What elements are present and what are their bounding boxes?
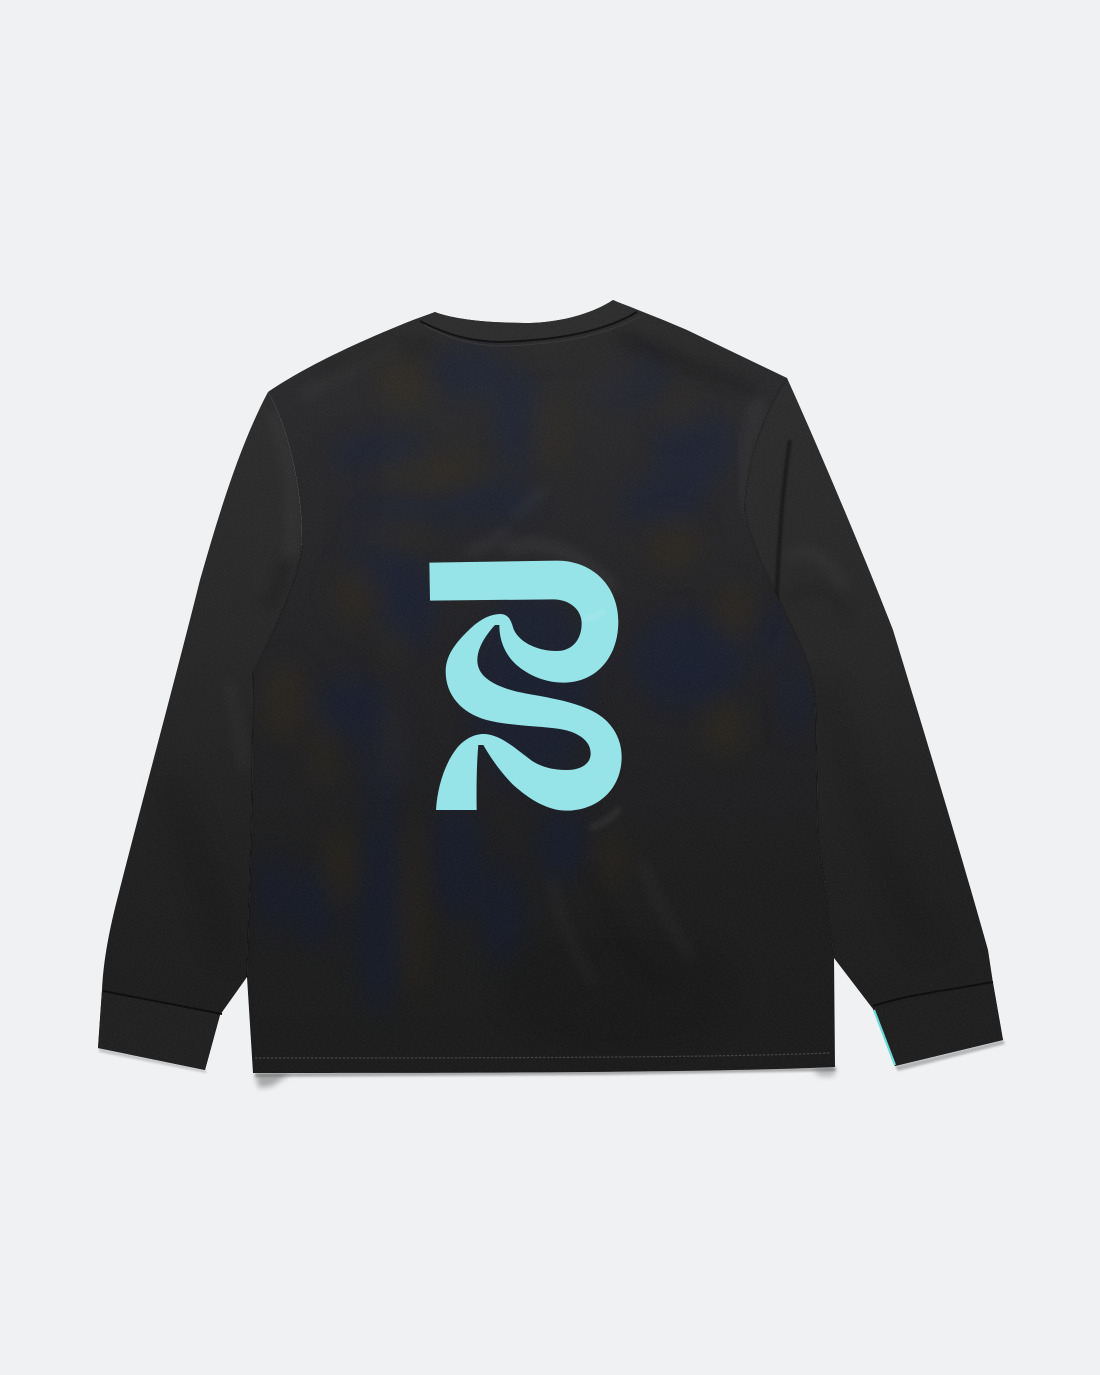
left sleeve: [98, 392, 302, 1070]
sleeve-to-body seam, right: [745, 378, 834, 958]
teal logo print: [429, 561, 622, 811]
hem stitching: [255, 1053, 830, 1058]
collar: [416, 300, 640, 346]
left cuff: [98, 990, 222, 1070]
right sleeve: [745, 378, 1003, 1066]
brown dye blotches: [260, 353, 760, 1000]
product photo: long sleeve shirt, back view: [98, 300, 1006, 1090]
shirt body: [247, 300, 835, 1073]
darker lower back: [500, 930, 740, 1050]
folds around the print: [300, 345, 760, 985]
right cuff with teal piping: [873, 982, 1003, 1066]
sleeve-to-body shading line, left: [247, 545, 302, 977]
fabric grain overlay: [90, 295, 1010, 1080]
cast shadows under hem and cuffs: [98, 1040, 1005, 1088]
navy dye blotches: [268, 382, 730, 992]
